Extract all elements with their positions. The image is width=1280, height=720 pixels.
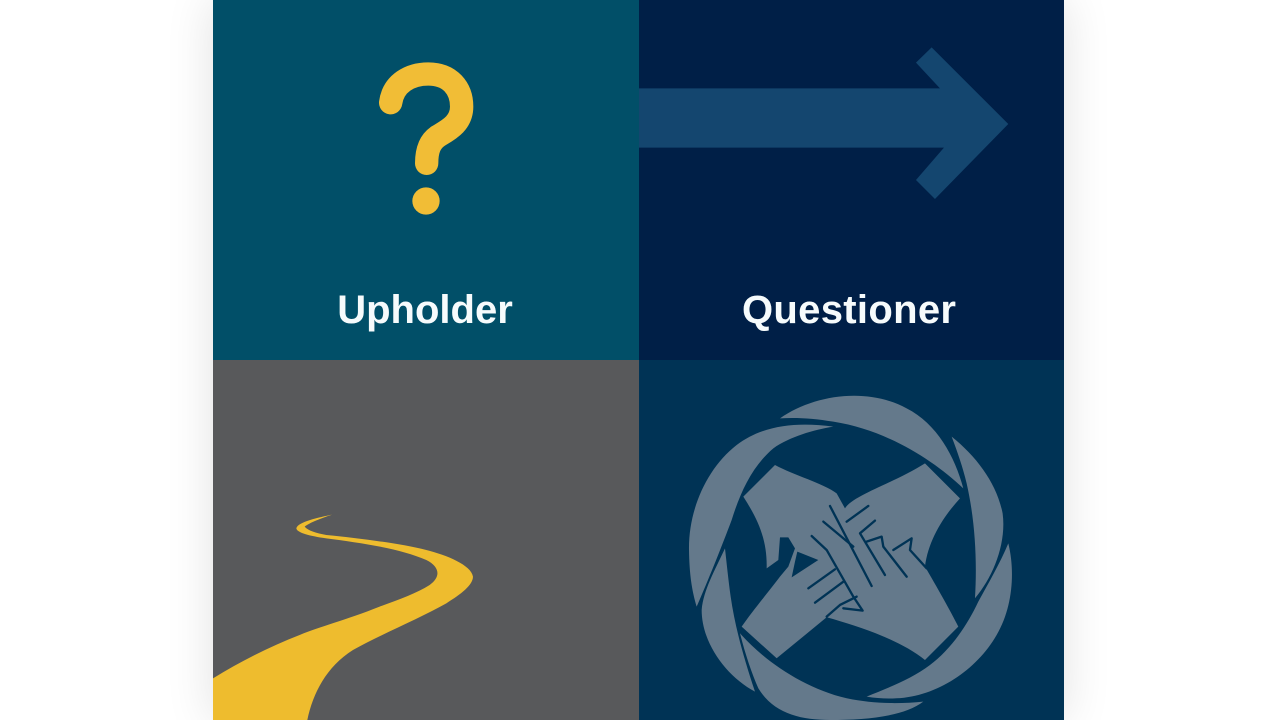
panel: obliger: [639, 360, 1064, 720]
finger lines: [808, 506, 927, 617]
heading: Upholder: Upholder: [337, 288, 513, 332]
ring blades: [689, 396, 1012, 720]
four tendencies grid: [213, 0, 1064, 720]
panel: rebel: [213, 360, 639, 720]
icon: joined hands in a ring: [689, 396, 1012, 720]
notch between thumb and palm: [792, 552, 818, 577]
icon: question mark: [391, 74, 462, 215]
icon: winding road: [213, 515, 473, 720]
panel: questioner: [639, 0, 1064, 360]
four hands silhouette: [742, 463, 960, 660]
panel: upholder: [213, 0, 639, 360]
heading: Questioner: Questioner: [742, 288, 956, 332]
icon: arrow: [639, 47, 1008, 199]
